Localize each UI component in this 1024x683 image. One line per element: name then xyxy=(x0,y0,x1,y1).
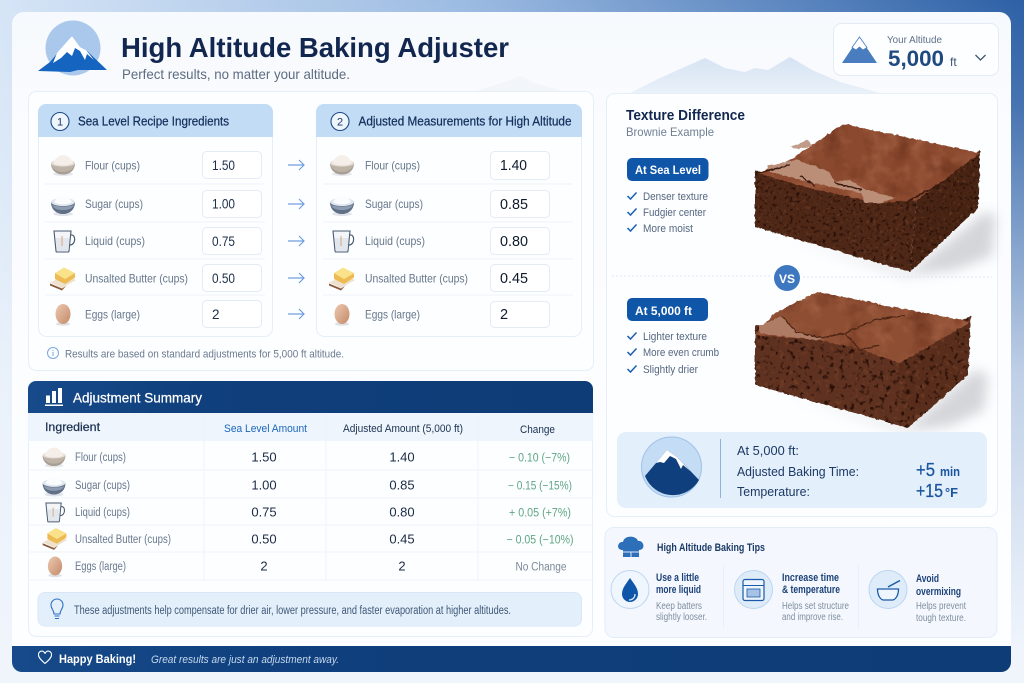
sea level badge xyxy=(627,158,708,181)
altitude badge xyxy=(627,298,708,321)
row: adjusted butter: Unsalted Butter (cups) xyxy=(365,272,468,286)
tip: overmixing: Avoid xyxy=(916,573,939,585)
vs divider: VS xyxy=(779,272,795,286)
table row: flour: 1.40 xyxy=(389,450,415,464)
altitude traits xyxy=(628,331,719,376)
icon: chevron xyxy=(976,55,986,60)
header: adjusted xyxy=(316,104,582,137)
sea level badge: At Sea Level xyxy=(635,163,701,177)
panel: sea level ingredients xyxy=(38,104,273,336)
image: high altitude brownie xyxy=(755,292,988,432)
row: adjusted eggs: 2 xyxy=(500,307,508,323)
texture heading: Texture Difference xyxy=(626,108,745,124)
row: eggs xyxy=(56,300,262,328)
table row: flour: Flour (cups) xyxy=(75,452,126,464)
row: adjusted flour: 1.40 xyxy=(500,158,527,174)
texture subheading: Brownie Example xyxy=(626,125,714,139)
table row: sugar: 0.85 xyxy=(389,478,415,492)
altitude traits: Slightly drier xyxy=(643,364,698,376)
tips heading: High Altitude Baking Tips xyxy=(657,542,765,554)
subtitle: Perfect results, no matter your altitude. xyxy=(122,66,350,82)
row: adjusted butter xyxy=(329,264,550,292)
altitude traits: Lighter texture xyxy=(643,331,707,343)
table row: butter: 0.50 xyxy=(251,532,277,546)
row: adjusted liquid xyxy=(333,228,550,254)
tip: overmixing: overmixing xyxy=(916,586,961,598)
icon: chef hat xyxy=(618,537,643,557)
arrows between panels xyxy=(288,160,304,319)
row: sugar: Sugar (cups) xyxy=(85,197,143,211)
row: butter: 0.50 xyxy=(212,271,235,286)
adjusted location label: At 5,000 ft: xyxy=(737,444,799,458)
table row: flour: 1.50 xyxy=(251,450,277,464)
table row: sugar: Sugar (cups) xyxy=(75,480,130,492)
row: flour xyxy=(51,152,262,178)
tip: liquid xyxy=(611,570,707,623)
row: adjusted eggs: Eggs (large) xyxy=(365,308,420,322)
header: sea level: 1 xyxy=(57,116,63,128)
icon: bar chart xyxy=(45,388,63,406)
tip: time and temperature: Increase time xyxy=(782,572,839,584)
table row: eggs: No Change xyxy=(516,562,566,574)
row: liquid xyxy=(54,228,262,254)
header logo: mountain xyxy=(38,20,107,76)
baking time row: min xyxy=(940,465,960,479)
altitude selector xyxy=(834,24,998,76)
tip: liquid: Keep batters xyxy=(656,601,702,612)
row: adjusted sugar xyxy=(330,190,550,218)
row: sugar xyxy=(51,190,262,218)
row: adjusted sugar: 0.85 xyxy=(500,197,528,213)
row: adjusted flour: Flour (cups) xyxy=(365,158,420,172)
table header row: Sea Level Amount xyxy=(224,423,307,435)
temperature row: +15 xyxy=(916,481,943,501)
tip: liquid: Use a little xyxy=(656,572,699,584)
row: flour: Flour (cups) xyxy=(85,158,140,172)
table header row xyxy=(28,413,592,441)
table row: liquid: Liquid (cups) xyxy=(75,507,130,519)
row: adjusted butter: 0.45 xyxy=(500,271,528,287)
table row: flour: − 0.10 (−7%) xyxy=(509,452,570,464)
icon: mountain badge xyxy=(642,437,702,497)
icon: mixing bowl xyxy=(869,570,907,608)
icon: oven xyxy=(734,570,772,608)
table header row: Ingredient xyxy=(45,420,101,434)
row: liquid: 0.75 xyxy=(212,234,235,249)
icon: heart xyxy=(38,651,52,664)
footer tagline: Great results are just an adjustment away. xyxy=(151,654,339,666)
tip: overmixing xyxy=(869,570,966,624)
table row: liquid: + 0.05 (+7%) xyxy=(509,508,571,520)
row: sugar: 1.00 xyxy=(212,196,235,212)
baking time row: +5 xyxy=(916,460,935,480)
tip: liquid: more liquid xyxy=(656,584,701,596)
altitude label: Your Altitude xyxy=(887,34,942,46)
footer banner xyxy=(12,646,1011,672)
table row: sugar xyxy=(43,477,572,496)
row: adjusted sugar: Sugar (cups) xyxy=(365,197,423,211)
image: sea level brownie xyxy=(755,124,996,276)
temperature row xyxy=(737,481,958,501)
summary header bar xyxy=(28,381,593,413)
callout: why adjustments help: These adjustments help compensate for drier air, lower pressure, and faster evaporation at higher altitudes. xyxy=(74,605,511,617)
row: flour: 1.50 xyxy=(212,158,235,173)
row: adjusted liquid: 0.80 xyxy=(500,234,528,250)
table row: butter: 0.45 xyxy=(389,532,415,546)
header: adjusted: Adjusted Measurements for High Altitude xyxy=(358,114,572,128)
altitude unit: ft xyxy=(950,55,957,69)
table row: butter: − 0.05 (−10%) xyxy=(506,534,574,546)
table row: eggs: 2 xyxy=(398,558,406,574)
table row: butter xyxy=(43,528,574,550)
vs divider xyxy=(612,265,992,291)
table row: sugar: − 0.15 (−15%) xyxy=(508,480,572,492)
baking time row: Adjusted Baking Time: xyxy=(737,465,859,479)
row: eggs: 2 xyxy=(212,307,220,322)
row: butter xyxy=(50,264,262,292)
table row: eggs: 2 xyxy=(260,558,268,574)
table row: eggs xyxy=(48,556,566,577)
table row: flour xyxy=(43,448,570,467)
tip: time and temperature: Helps set structure xyxy=(782,601,849,612)
sea level traits xyxy=(628,191,708,235)
sea level traits: Fudgier center xyxy=(643,207,706,219)
table row: butter: Unsalted Butter (cups) xyxy=(75,534,171,546)
tip: overmixing: Helps prevent xyxy=(916,601,966,612)
title: High Altitude Baking Adjuster xyxy=(121,32,509,63)
icon: altitude mountain xyxy=(842,37,877,63)
panel: adjustment summary xyxy=(28,381,593,636)
summary heading: Adjustment Summary xyxy=(73,390,202,406)
header: sea level xyxy=(38,104,273,137)
table row: liquid xyxy=(46,503,571,522)
row: liquid: Liquid (cups) xyxy=(85,234,145,248)
tip: time and temperature: & temperature xyxy=(782,584,840,596)
panel: adjusted measurements xyxy=(316,104,582,336)
icon: lightbulb xyxy=(51,599,63,618)
background mountain watermark xyxy=(470,57,880,93)
tip: time and temperature: and improve rise. xyxy=(782,612,843,623)
header: adjusted: 2 xyxy=(337,116,343,128)
altitude badge: At 5,000 ft xyxy=(635,304,692,318)
callout: why adjustments help xyxy=(38,592,582,626)
panel: ingredient calculator xyxy=(28,92,594,370)
callout: baking time and temperature xyxy=(617,432,987,508)
sea level traits: Denser texture xyxy=(643,191,708,203)
note: standard adjustments: Results are based on standard adjustments for 5,000 ft altitude. xyxy=(65,348,344,360)
row: adjusted flour xyxy=(330,152,550,180)
panel: texture difference xyxy=(606,94,998,516)
table header row: Adjusted Amount (5,000 ft) xyxy=(343,423,463,435)
baking time row xyxy=(737,460,960,480)
table row: eggs: Eggs (large) xyxy=(75,561,126,573)
altitude traits: More even crumb xyxy=(643,347,719,359)
row: adjusted liquid: Liquid (cups) xyxy=(365,234,425,248)
tip: overmixing: tough texture. xyxy=(916,613,966,624)
table row: liquid: 0.75 xyxy=(251,504,277,520)
temperature row: Temperature: xyxy=(737,485,810,499)
panel: baking tips xyxy=(605,528,997,638)
tip: liquid: slightly looser. xyxy=(656,612,707,623)
header: sea level: Sea Level Recipe Ingredients xyxy=(78,114,229,128)
temperature row: °F xyxy=(945,486,958,500)
footer message: Happy Baking! xyxy=(59,652,136,666)
table row: liquid: 0.80 xyxy=(389,504,415,520)
icon: water drop xyxy=(611,570,649,608)
row: eggs: Eggs (large) xyxy=(85,308,140,322)
tip: time and temperature xyxy=(734,570,849,623)
table header row: Change xyxy=(520,424,555,436)
row: adjusted eggs xyxy=(334,302,550,328)
row: butter: Unsalted Butter (cups) xyxy=(85,272,188,286)
altitude value: 5,000 xyxy=(888,46,944,71)
sea level traits: More moist xyxy=(643,223,693,235)
table row: sugar: 1.00 xyxy=(251,478,277,492)
